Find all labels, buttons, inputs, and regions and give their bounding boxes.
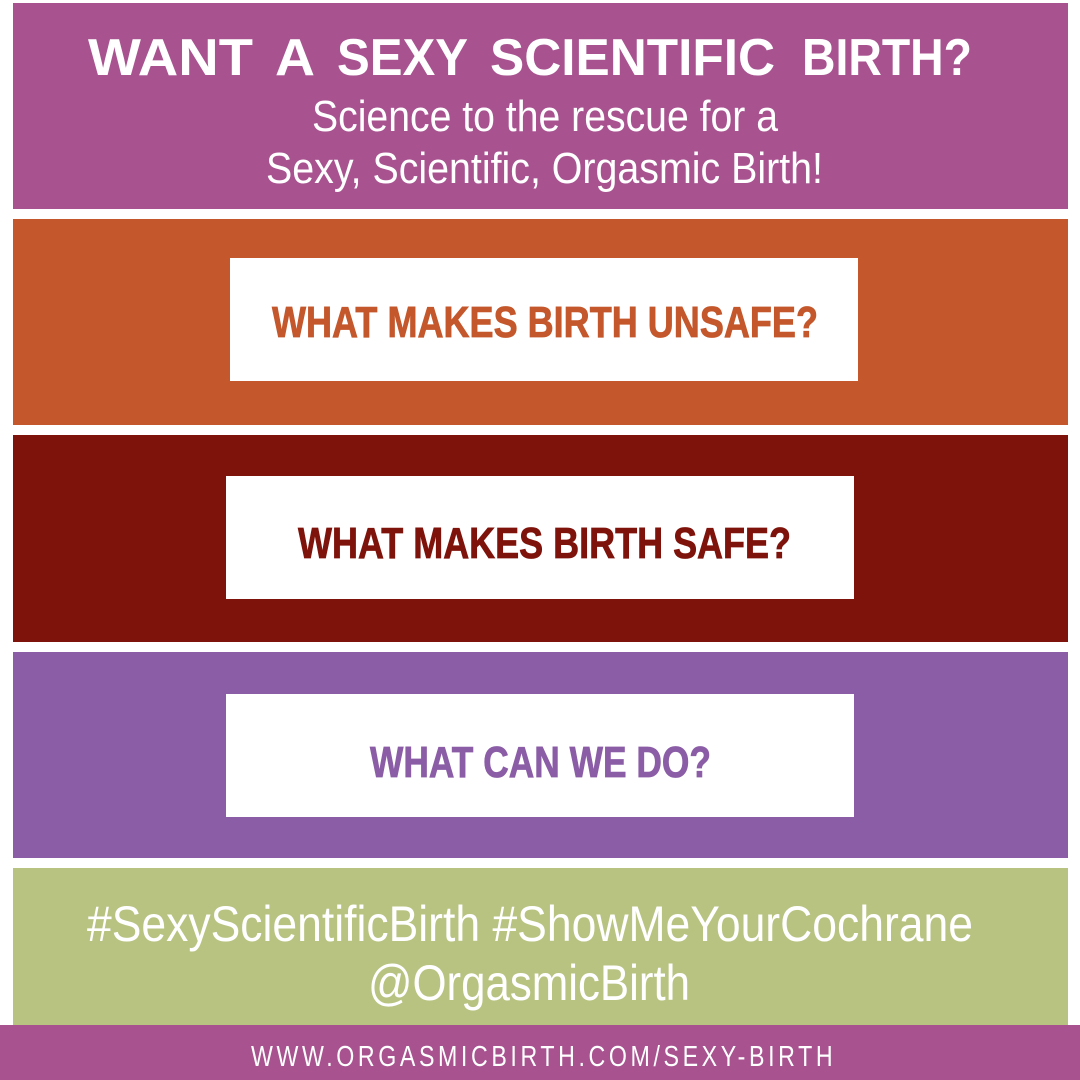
footer bar [0, 1025, 1080, 1080]
heading: safe: WHAT MAKES BIRTH SAFE? [298, 519, 791, 568]
panel: what makes birth safe [13, 435, 1068, 642]
title: BIRTH? [802, 29, 972, 87]
title: SCIENTIFIC [490, 29, 775, 87]
title [88, 29, 972, 87]
heading: unsafe: WHAT MAKES BIRTH UNSAFE? [272, 298, 818, 347]
panel: header [13, 3, 1068, 209]
subtitle: Science to the rescue for a [312, 92, 778, 141]
panel: what can we do [13, 652, 1068, 858]
heading: what can we do: WHAT CAN WE DO? [370, 738, 711, 787]
hashtags text: #SexyScientificBirth #ShowMeYourCochrane [87, 896, 973, 952]
title: WANT [88, 29, 253, 87]
subtitle [266, 92, 823, 193]
panel: hashtags [13, 868, 1068, 1025]
title: A [275, 29, 315, 87]
handle text: @OrgasmicBirth [368, 955, 690, 1011]
subtitle: Sexy, Scientific, Orgasmic Birth! [266, 144, 823, 193]
panel: what makes birth unsafe [13, 219, 1068, 425]
title: SEXY [337, 29, 468, 87]
website url: WWW.ORGASMICBIRTH.COM/SEXY-BIRTH [251, 1039, 833, 1073]
